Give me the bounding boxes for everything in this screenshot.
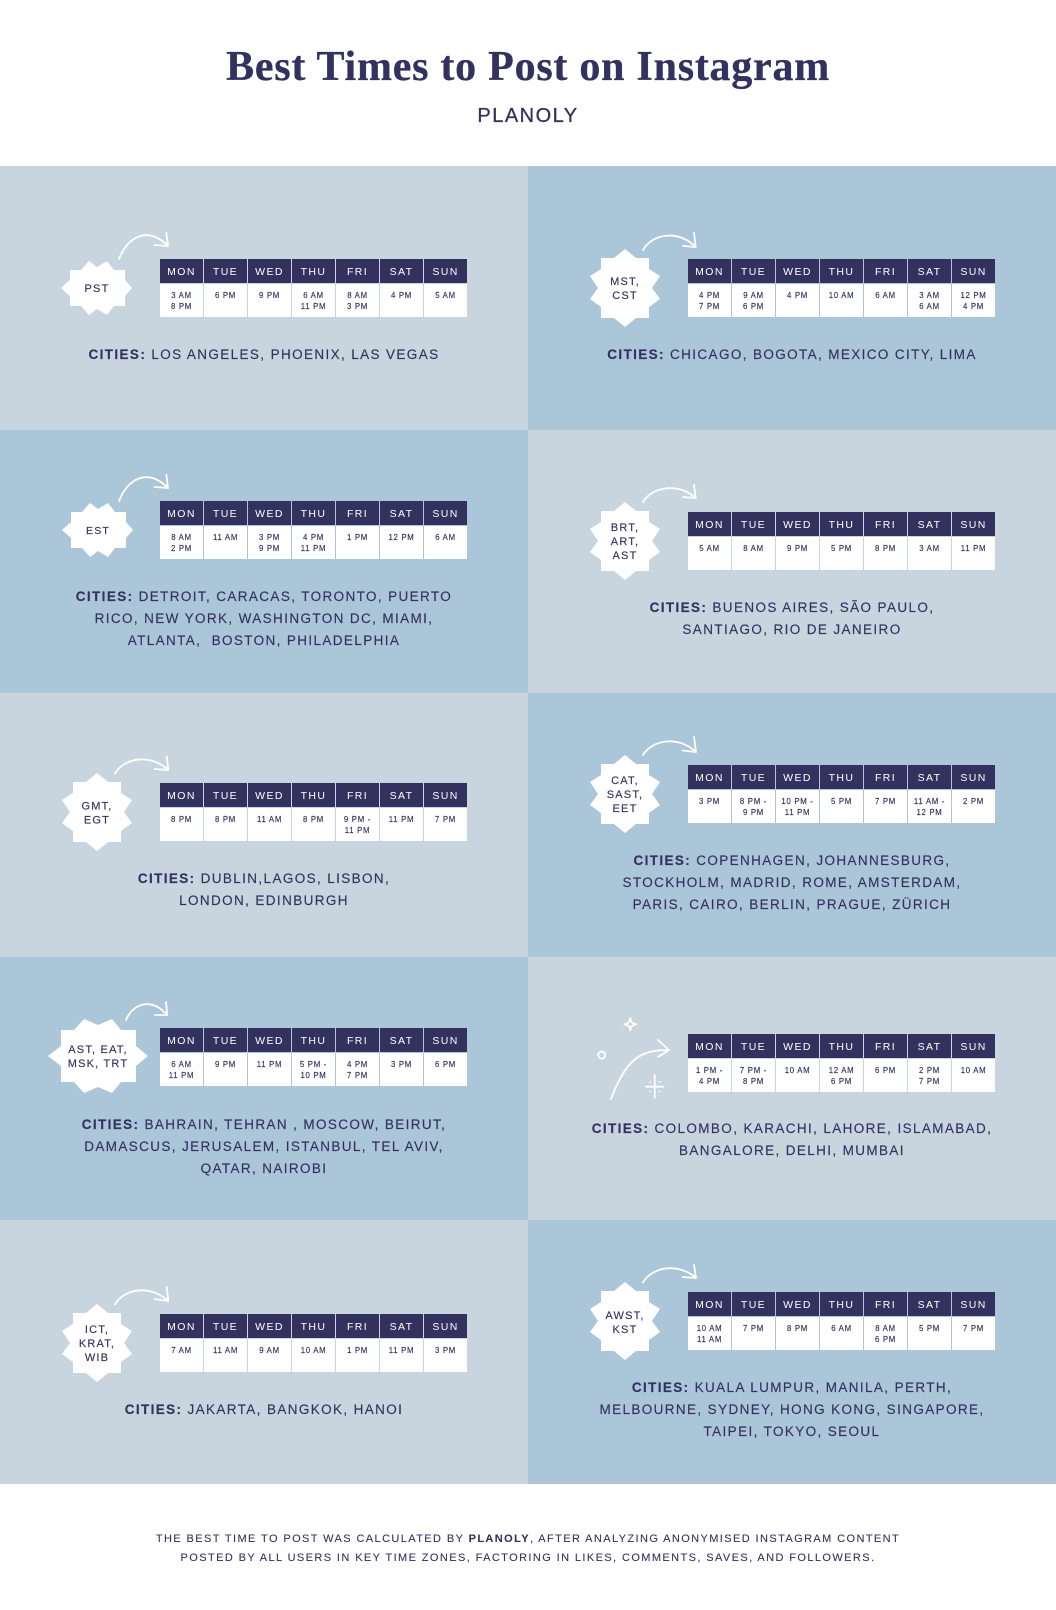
footer note: THE BEST TIME TO POST WAS CALCULATED BY PLANOLY, AFTER ANALYZING ANONYMISED INSTAGRAM CONTENT xyxy=(156,1533,900,1545)
badge: PST: PST xyxy=(84,283,110,295)
schedule table: South Asia: FRI xyxy=(875,1041,896,1053)
schedule table: South Asia: 6 PM xyxy=(875,1066,896,1075)
panel: CAT, SAST, EET xyxy=(528,693,1056,957)
schedule table: MST, CST: TUE xyxy=(741,266,766,278)
schedule table: AST, EAT, MSK, TRT: MON xyxy=(167,1035,196,1047)
schedule table: AST, EAT, MSK, TRT: TUE xyxy=(213,1035,238,1047)
cities: EST: CITIES: DETROIT, CARACAS, TORONTO, PUERTO xyxy=(76,589,452,604)
badge: AST, EAT, MSK, TRT: AST, EAT, xyxy=(68,1044,127,1056)
schedule table: AWST, KST: WED xyxy=(783,1299,812,1311)
schedule table: South Asia: SAT xyxy=(918,1041,941,1053)
schedule table: EST: 12 PM xyxy=(388,533,415,542)
schedule table: EST: WED xyxy=(255,508,284,520)
schedule table: CAT, SAST, EET xyxy=(688,765,995,823)
badge: ICT, KRAT, WIB: ICT, xyxy=(84,1324,109,1336)
schedule table: CAT, SAST, EET: 3 PM xyxy=(699,797,720,806)
schedule table: EST: SUN xyxy=(432,508,459,520)
schedule table: South Asia: 8 PM xyxy=(743,1077,764,1086)
badge: CAT, SAST, EET: SAST, xyxy=(606,788,643,800)
schedule table: PST: 11 PM xyxy=(301,302,326,311)
schedule table: AST, EAT, MSK, TRT: THU xyxy=(301,1035,326,1047)
schedule table: EST: 9 PM xyxy=(259,544,280,553)
badge: ICT, KRAT, WIB: WIB xyxy=(84,1352,109,1364)
schedule table: EST: FRI xyxy=(347,508,368,520)
panel: ICT, KRAT, WIB xyxy=(0,1220,528,1484)
schedule table: South Asia: TUE xyxy=(741,1041,766,1053)
schedule table: EST: 11 AM xyxy=(213,533,238,542)
schedule table: MST, CST: 4 PM xyxy=(787,291,808,300)
schedule table: ICT, KRAT, WIB: THU xyxy=(301,1321,326,1333)
schedule table: GMT, EGT: 11 PM xyxy=(389,815,414,824)
subtitle: PLANOLY xyxy=(477,105,579,127)
schedule table: ICT, KRAT, WIB: WED xyxy=(255,1321,284,1333)
schedule table: GMT, EGT xyxy=(160,783,467,841)
badge: GMT, EGT xyxy=(62,773,132,851)
schedule table: PST: THU xyxy=(301,266,326,278)
schedule table: South Asia: 2 PM xyxy=(919,1066,940,1075)
schedule table: South Asia: 6 PM xyxy=(831,1077,852,1086)
schedule table: GMT, EGT: MON xyxy=(167,790,196,802)
schedule table: GMT, EGT: WED xyxy=(255,790,284,802)
schedule table: South Asia: 4 PM xyxy=(699,1077,720,1086)
schedule table: BRT, ART, AST: 5 PM xyxy=(831,544,852,553)
badge: AWST, KST: KST xyxy=(612,1324,637,1336)
arrow xyxy=(642,232,697,251)
badge: EST: EST xyxy=(85,525,110,537)
schedule table: PST: 5 AM xyxy=(435,291,456,300)
schedule table: ICT, KRAT, WIB: FRI xyxy=(347,1321,368,1333)
schedule table: AWST, KST: 5 PM xyxy=(919,1324,940,1333)
schedule table: BRT, ART, AST: MON xyxy=(695,519,724,531)
schedule table: PST xyxy=(160,259,467,317)
schedule table: GMT, EGT: 7 PM xyxy=(435,815,456,824)
badge: PST xyxy=(61,261,132,315)
cities: AWST, KST: MELBOURNE, SYDNEY, HONG KONG, SINGAPORE, xyxy=(599,1402,985,1416)
schedule table: CAT, SAST, EET: TUE xyxy=(741,772,766,784)
schedule table: ICT, KRAT, WIB: 11 AM xyxy=(213,1346,238,1355)
badge: CAT, SAST, EET: CAT, xyxy=(611,774,638,786)
schedule table: GMT, EGT: 8 PM xyxy=(303,815,324,824)
schedule table: AWST, KST: THU xyxy=(829,1299,854,1311)
schedule table: South Asia: 12 AM xyxy=(829,1066,854,1075)
schedule table: AWST, KST: SAT xyxy=(918,1299,941,1311)
title: Best Times to Post on Instagram xyxy=(226,44,830,90)
schedule table: EST: 2 PM xyxy=(171,544,192,553)
badge: MST, CST: CST xyxy=(612,290,638,302)
schedule table: South Asia: MON xyxy=(695,1041,724,1053)
schedule table: AWST, KST: 8 AM xyxy=(875,1324,896,1333)
schedule table: BRT, ART, AST xyxy=(688,512,995,570)
panel: AST, EAT, MSK, TRT xyxy=(0,957,528,1220)
schedule table: AWST, KST: 6 PM xyxy=(875,1335,896,1344)
cities: GMT, EGT xyxy=(138,871,390,908)
schedule table: PST: SUN xyxy=(432,266,459,278)
schedule table: South Asia: 10 AM xyxy=(785,1066,810,1075)
schedule table: CAT, SAST, EET: 12 PM xyxy=(916,808,943,817)
schedule table: EST: MON xyxy=(167,508,196,520)
schedule table: AST, EAT, MSK, TRT: SAT xyxy=(390,1035,413,1047)
schedule table: AWST, KST: 7 PM xyxy=(963,1324,984,1333)
arrow xyxy=(642,1264,697,1284)
schedule table: ICT, KRAT, WIB: SUN xyxy=(432,1321,459,1333)
schedule table: South Asia xyxy=(688,1034,995,1092)
schedule table: AWST, KST: TUE xyxy=(741,1299,766,1311)
panel: MST, CST xyxy=(528,166,1056,430)
schedule table: MST, CST: 4 PM xyxy=(963,302,984,311)
schedule table: ICT, KRAT, WIB: MON xyxy=(167,1321,196,1333)
schedule table: South Asia: 1 PM - xyxy=(696,1066,723,1075)
schedule table: BRT, ART, AST: WED xyxy=(783,519,812,531)
schedule table: BRT, ART, AST: 8 PM xyxy=(875,544,896,553)
badge: AWST, KST: AWST, xyxy=(605,1310,644,1322)
schedule table: MST, CST: 12 PM xyxy=(960,291,987,300)
cities: CAT, SAST, EET: PARIS, CAIRO, BERLIN, PRAGUE, ZÜRICH xyxy=(633,897,951,912)
schedule table: South Asia: WED xyxy=(783,1041,812,1053)
schedule table: AST, EAT, MSK, TRT: 11 PM xyxy=(169,1071,194,1080)
schedule table: AST, EAT, MSK, TRT: 7 PM xyxy=(347,1071,368,1080)
schedule table: PST: SAT xyxy=(390,266,413,278)
schedule table: GMT, EGT: 9 PM - xyxy=(344,815,371,824)
footer note: POSTED BY ALL USERS IN KEY TIME ZONES, FACTORING IN LIKES, COMMENTS, SAVES, AND FOLLOWERS. xyxy=(181,1552,875,1564)
schedule table: CAT, SAST, EET: 2 PM xyxy=(963,797,984,806)
schedule table: AWST, KST: SUN xyxy=(960,1299,987,1311)
schedule table: AWST, KST: 7 PM xyxy=(743,1324,764,1333)
badge: ICT, KRAT, WIB xyxy=(62,1304,132,1382)
schedule table: PST: 3 AM xyxy=(171,291,192,300)
schedule table: GMT, EGT: 8 PM xyxy=(215,815,236,824)
cities: GMT, EGT: CITIES: DUBLIN,LAGOS, LISBON, xyxy=(138,871,390,886)
schedule table: ICT, KRAT, WIB: SAT xyxy=(390,1321,413,1333)
schedule table: BRT, ART, AST: FRI xyxy=(875,519,896,531)
arrow xyxy=(118,232,169,260)
cities: AWST, KST xyxy=(599,1380,985,1438)
schedule table: AST, EAT, MSK, TRT: FRI xyxy=(347,1035,368,1047)
schedule table: ICT, KRAT, WIB: 7 AM xyxy=(171,1346,192,1355)
cities: BRT, ART, AST xyxy=(650,600,934,637)
schedule table: BRT, ART, AST: SAT xyxy=(918,519,941,531)
arrow xyxy=(125,1001,168,1021)
arrow xyxy=(118,474,169,502)
schedule table: CAT, SAST, EET: 9 PM xyxy=(743,808,764,817)
schedule table: AST, EAT, MSK, TRT: SUN xyxy=(432,1035,459,1047)
badge: BRT, ART, AST: BRT, xyxy=(611,522,639,534)
schedule table: PST: TUE xyxy=(213,266,238,278)
badge: AST, EAT, MSK, TRT: MSK, TRT xyxy=(67,1058,128,1070)
schedule table: MST, CST: THU xyxy=(829,266,854,278)
schedule table: GMT, EGT: TUE xyxy=(213,790,238,802)
schedule table: AWST, KST xyxy=(688,1292,995,1350)
schedule table: MST, CST: 6 PM xyxy=(743,302,764,311)
badge: BRT, ART, AST xyxy=(590,502,660,580)
schedule table: CAT, SAST, EET: 11 AM - xyxy=(914,797,945,806)
schedule table: AST, EAT, MSK, TRT: WED xyxy=(255,1035,284,1047)
schedule table: GMT, EGT: SUN xyxy=(432,790,459,802)
schedule table: CAT, SAST, EET: FRI xyxy=(875,772,896,784)
schedule table: MST, CST: 10 AM xyxy=(829,291,854,300)
schedule table: AST, EAT, MSK, TRT: 6 PM xyxy=(435,1060,456,1069)
schedule table: AST, EAT, MSK, TRT: 9 PM xyxy=(215,1060,236,1069)
schedule table: MST, CST: MON xyxy=(695,266,724,278)
schedule table: South Asia: SUN xyxy=(960,1041,987,1053)
cities: CAT, SAST, EET: STOCKHOLM, MADRID, ROME, AMSTERDAM, xyxy=(622,875,962,890)
schedule table: ICT, KRAT, WIB: 3 PM xyxy=(435,1346,456,1355)
cities: EST xyxy=(76,589,452,648)
schedule table: AST, EAT, MSK, TRT: 10 PM xyxy=(300,1071,327,1080)
badge: AST, EAT, MSK, TRT xyxy=(48,1019,148,1093)
schedule table: AST, EAT, MSK, TRT: 11 PM xyxy=(257,1060,282,1069)
cities: AST, EAT, MSK, TRT: QATAR, NAIROBI xyxy=(201,1160,327,1176)
schedule table: BRT, ART, AST: SUN xyxy=(960,519,987,531)
cities: BRT, ART, AST: CITIES: BUENOS AIRES, SÃO PAULO, xyxy=(650,600,934,615)
schedule table: AST, EAT, MSK, TRT: 5 PM - xyxy=(300,1060,327,1069)
schedule table: PST: FRI xyxy=(347,266,368,278)
cities: AST, EAT, MSK, TRT xyxy=(82,1116,446,1176)
schedule table: AST, EAT, MSK, TRT: 6 AM xyxy=(171,1060,192,1069)
schedule table: BRT, ART, AST: 5 AM xyxy=(699,544,720,553)
schedule table: MST, CST: 9 AM xyxy=(743,291,764,300)
arrow xyxy=(642,484,696,503)
panel: BRT, ART, AST xyxy=(528,430,1056,693)
cities: South Asia xyxy=(592,1121,992,1158)
cities: EST: RICO, NEW YORK, WASHINGTON DC, MIAMI, xyxy=(95,611,433,626)
schedule table: ICT, KRAT, WIB: 1 PM xyxy=(347,1346,368,1355)
panel: South Asia xyxy=(528,957,1056,1220)
schedule table: EST: 11 PM xyxy=(301,544,326,553)
panel: AWST, KST xyxy=(528,1220,1056,1484)
schedule table: South Asia: THU xyxy=(829,1041,854,1053)
schedule table: South Asia: 7 PM - xyxy=(740,1066,767,1075)
schedule table: PST: MON xyxy=(167,266,196,278)
schedule table: EST: 1 PM xyxy=(347,533,368,542)
cities: South Asia: BANGALORE, DELHI, MUMBAI xyxy=(679,1143,905,1158)
arrow xyxy=(642,736,697,756)
schedule table: MST, CST: WED xyxy=(783,266,812,278)
panel: GMT, EGT xyxy=(0,693,528,957)
schedule table: CAT, SAST, EET: SAT xyxy=(918,772,941,784)
schedule table: PST: 8 PM xyxy=(171,302,192,311)
schedule table: CAT, SAST, EET: SUN xyxy=(960,772,987,784)
schedule table: GMT, EGT: 11 AM xyxy=(257,815,282,824)
schedule table: ICT, KRAT, WIB: 10 AM xyxy=(301,1346,326,1355)
arrow xyxy=(114,1286,170,1306)
schedule table: EST: 3 PM xyxy=(259,533,280,542)
schedule table: MST, CST: 4 PM xyxy=(699,291,720,300)
schedule table: AWST, KST: 8 PM xyxy=(787,1324,808,1333)
schedule table: CAT, SAST, EET: 11 PM xyxy=(785,808,810,817)
schedule table: EST: 8 AM xyxy=(171,533,192,542)
cities: AWST, KST: CITIES: KUALA LUMPUR, MANILA, PERTH, xyxy=(632,1380,952,1394)
schedule table: GMT, EGT: 11 PM xyxy=(345,826,370,835)
schedule table: GMT, EGT: THU xyxy=(301,790,326,802)
schedule table: MST, CST: SAT xyxy=(918,266,941,278)
badge: AWST, KST xyxy=(590,1282,660,1360)
cities: EST: ATLANTA, BOSTON, PHILADELPHIA xyxy=(128,633,400,648)
schedule table: MST, CST: FRI xyxy=(875,266,896,278)
schedule table: AST, EAT, MSK, TRT xyxy=(160,1028,467,1086)
schedule table: CAT, SAST, EET: 5 PM xyxy=(831,797,852,806)
schedule table: CAT, SAST, EET: 8 PM - xyxy=(740,797,767,806)
schedule table: AWST, KST: 10 AM xyxy=(697,1324,722,1333)
schedule table: AST, EAT, MSK, TRT: 3 PM xyxy=(391,1060,412,1069)
schedule table: ICT, KRAT, WIB: TUE xyxy=(213,1321,238,1333)
badge: MST, CST xyxy=(590,249,660,327)
schedule table: ICT, KRAT, WIB: 11 PM xyxy=(389,1346,414,1355)
schedule table: CAT, SAST, EET: 10 PM - xyxy=(781,797,814,806)
cities: AST, EAT, MSK, TRT: CITIES: BAHRAIN, TEHRAN , MOSCOW, BEIRUT, xyxy=(82,1116,446,1132)
schedule table: South Asia: 7 PM xyxy=(919,1077,940,1086)
badge: GMT, EGT: GMT, xyxy=(81,800,112,812)
cities: CAT, SAST, EET xyxy=(622,853,962,912)
schedule table: BRT, ART, AST: THU xyxy=(829,519,854,531)
schedule table: BRT, ART, AST: 11 PM xyxy=(961,544,986,553)
schedule table: AST, EAT, MSK, TRT: 4 PM xyxy=(347,1060,368,1069)
schedule table: PST: 4 PM xyxy=(391,291,412,300)
badge: ICT, KRAT, WIB: KRAT, xyxy=(78,1338,115,1350)
schedule table: PST: 6 AM xyxy=(303,291,324,300)
badge: GMT, EGT: EGT xyxy=(83,814,110,826)
schedule table: EST: THU xyxy=(301,508,326,520)
badge: BRT, ART, AST: ART, xyxy=(611,536,639,548)
schedule table: PST: 3 PM xyxy=(347,302,368,311)
schedule table: EST: TUE xyxy=(213,508,238,520)
schedule table: MST, CST: 3 AM xyxy=(919,291,940,300)
schedule table: EST: SAT xyxy=(390,508,413,520)
schedule table: ICT, KRAT, WIB: 9 AM xyxy=(259,1346,280,1355)
schedule table: BRT, ART, AST: TUE xyxy=(741,519,766,531)
schedule table: MST, CST xyxy=(688,259,995,317)
schedule table: MST, CST: 7 PM xyxy=(699,302,720,311)
badge: BRT, ART, AST: AST xyxy=(612,550,638,562)
schedule table: AWST, KST: MON xyxy=(695,1299,724,1311)
cities: South Asia: CITIES: COLOMBO, KARACHI, LAHORE, ISLAMABAD, xyxy=(592,1121,992,1136)
cities: PST: CITIES: LOS ANGELES, PHOENIX, LAS VEGAS xyxy=(89,347,439,362)
schedule table: MST, CST: SUN xyxy=(960,266,987,278)
schedule table: MST, CST: 6 AM xyxy=(875,291,896,300)
schedule table: ICT, KRAT, WIB xyxy=(160,1314,467,1372)
cities: ICT, KRAT, WIB: CITIES: JAKARTA, BANGKOK, HANOI xyxy=(125,1402,403,1417)
cities: BRT, ART, AST: SANTIAGO, RIO DE JANEIRO xyxy=(682,622,902,637)
schedule table: CAT, SAST, EET: MON xyxy=(695,772,724,784)
schedule table: CAT, SAST, EET: 7 PM xyxy=(875,797,896,806)
schedule table: South Asia: 10 AM xyxy=(961,1066,986,1075)
icon: sparkle arrow xyxy=(597,1017,670,1100)
badge: CAT, SAST, EET: EET xyxy=(612,802,637,814)
schedule table: PST: 9 PM xyxy=(259,291,280,300)
schedule table: GMT, EGT: 8 PM xyxy=(171,815,192,824)
schedule table: AWST, KST: FRI xyxy=(875,1299,896,1311)
schedule table: PST: 8 AM xyxy=(347,291,368,300)
footer note xyxy=(156,1533,900,1564)
schedule table: EST: 6 AM xyxy=(435,533,456,542)
cities: AST, EAT, MSK, TRT: DAMASCUS, JERUSALEM, ISTANBUL, TEL AVIV, xyxy=(84,1138,444,1154)
schedule table: AWST, KST: 11 AM xyxy=(697,1335,722,1344)
schedule table: BRT, ART, AST: 3 AM xyxy=(919,544,940,553)
schedule table: CAT, SAST, EET: THU xyxy=(829,772,854,784)
schedule table: PST: 6 PM xyxy=(215,291,236,300)
schedule table: EST xyxy=(160,501,467,559)
schedule table: GMT, EGT: SAT xyxy=(390,790,413,802)
badge: MST, CST: MST, xyxy=(610,276,640,288)
schedule table: EST: 4 PM xyxy=(303,533,324,542)
panel: EST xyxy=(0,430,528,693)
badge: EST xyxy=(62,503,133,557)
cities: AWST, KST: TAIPEI, TOKYO, SEOUL xyxy=(704,1424,880,1438)
schedule table: AWST, KST: 6 AM xyxy=(831,1324,852,1333)
schedule table: PST: WED xyxy=(255,266,284,278)
arrow xyxy=(114,756,170,774)
schedule table: BRT, ART, AST: 8 AM xyxy=(743,544,764,553)
cities: GMT, EGT: LONDON, EDINBURGH xyxy=(179,893,349,908)
schedule table: BRT, ART, AST: 9 PM xyxy=(787,544,808,553)
schedule table: GMT, EGT: FRI xyxy=(347,790,368,802)
cities: CAT, SAST, EET: CITIES: COPENHAGEN, JOHANNESBURG, xyxy=(633,853,951,868)
cities: MST, CST: CITIES: CHICAGO, BOGOTA, MEXICO CITY, LIMA xyxy=(607,347,977,362)
schedule table: CAT, SAST, EET: WED xyxy=(783,772,812,784)
badge: CAT, SAST, EET xyxy=(590,755,660,833)
schedule table: MST, CST: 6 AM xyxy=(919,302,940,311)
panel: PST xyxy=(0,166,528,430)
